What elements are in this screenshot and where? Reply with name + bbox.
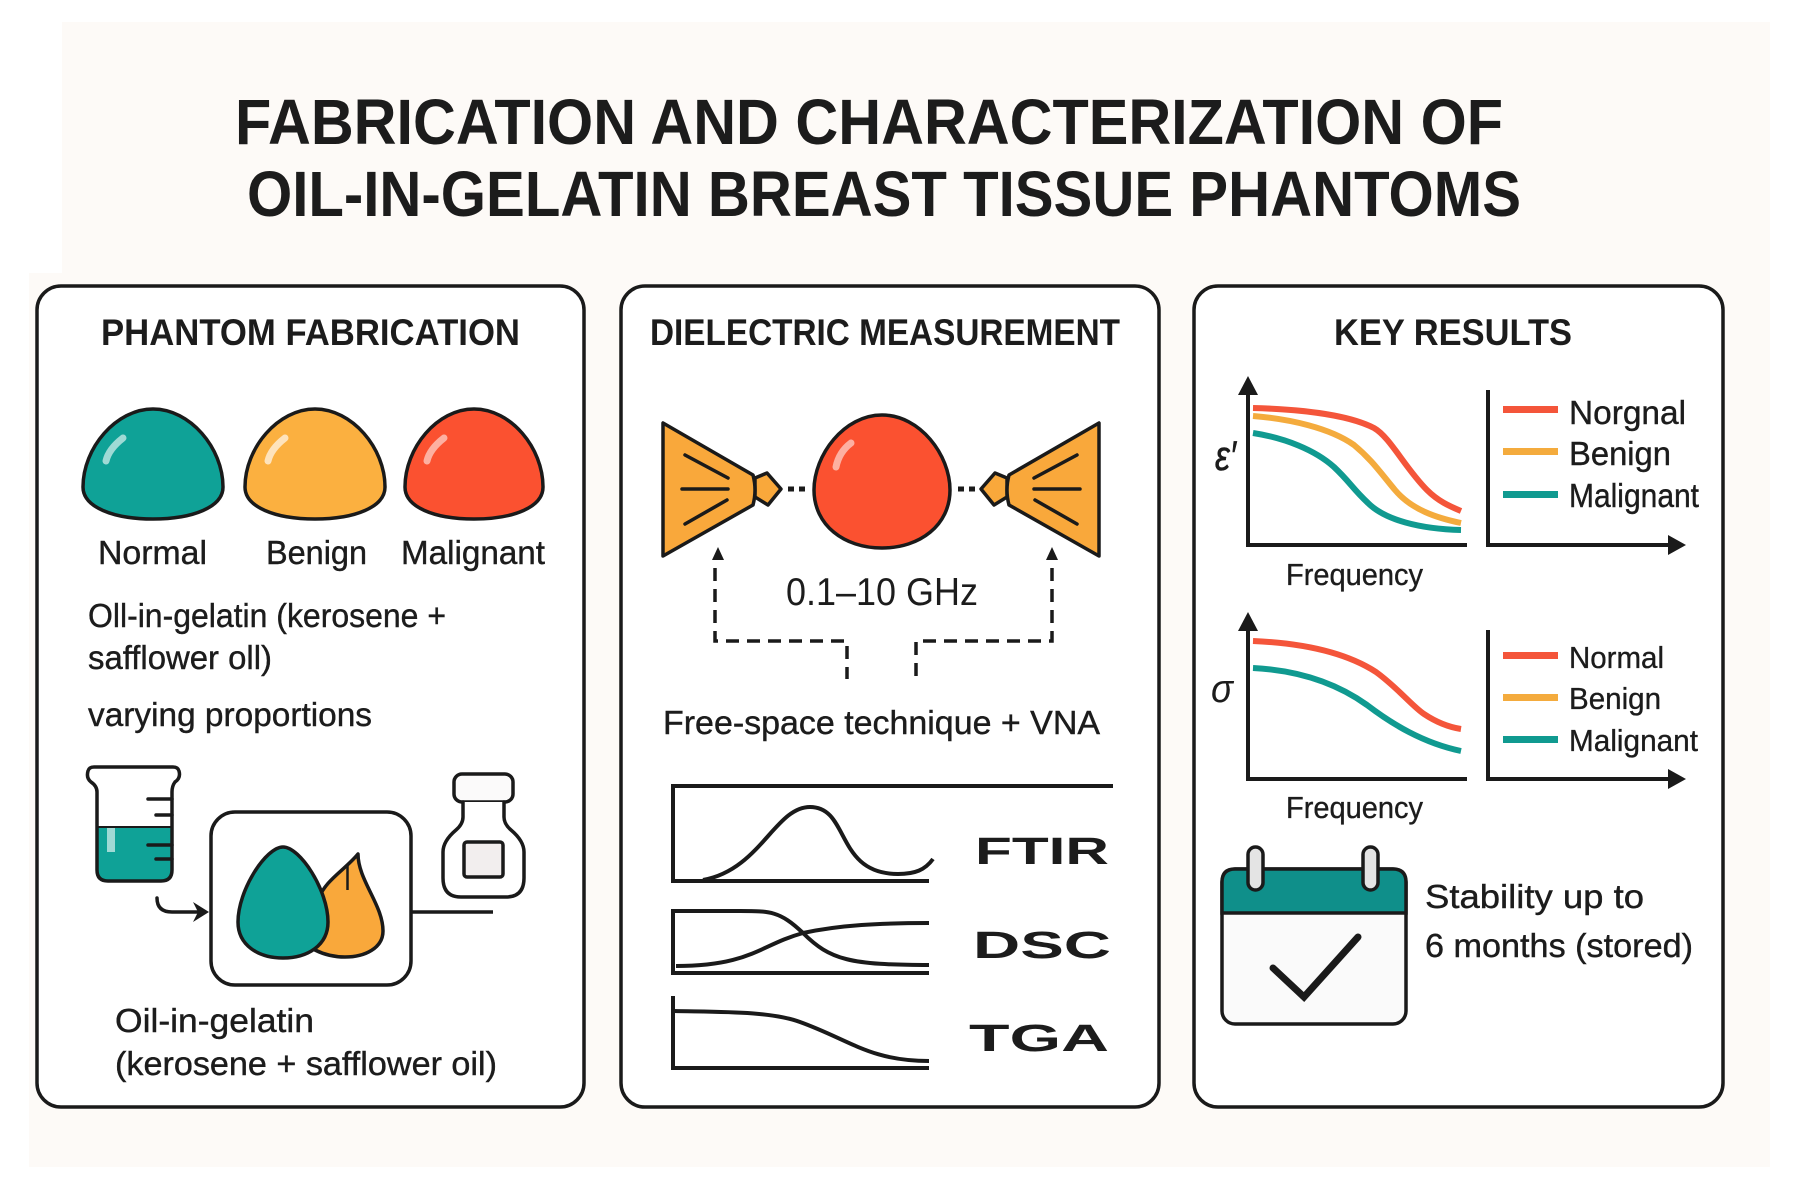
- icon: malignant phantom dome: [405, 409, 543, 519]
- icon: calendar with check mark: [1222, 847, 1406, 1024]
- legend: conductivity: Normal: [1569, 640, 1664, 675]
- icon: left horn antenna: [663, 423, 781, 556]
- label: DSC: DSC: [973, 925, 1111, 967]
- text: stability: 6 months (stored): [1425, 927, 1693, 964]
- text: composition: [88, 597, 446, 676]
- title: [235, 86, 1521, 230]
- icon: normal phantom dome: [83, 409, 223, 519]
- label: benign: Benign: [266, 534, 367, 571]
- chart: FTIR: [673, 786, 1113, 881]
- label: permittivity axis: ε′: [1215, 432, 1238, 479]
- heading: dielectric measurement: DIELECTRIC MEASUREMENT: [650, 312, 1120, 353]
- text: stability: Stability up to: [1425, 878, 1644, 915]
- arrow: beaker to mixture: [157, 898, 209, 922]
- legend: permittivity: Malignant: [1569, 477, 1699, 514]
- text: stability: [1425, 878, 1693, 964]
- icon: malignant phantom sphere: [814, 415, 950, 548]
- label: normal: Normal: [98, 534, 207, 571]
- connector line: [411, 910, 493, 914]
- icon: mixture box with oil and gelatin: [211, 812, 411, 985]
- label: TGA: TGA: [969, 1018, 1109, 1060]
- legend: conductivity: [1488, 630, 1698, 789]
- heading: key results: KEY RESULTS: [1334, 312, 1572, 353]
- signal dots: [958, 486, 975, 492]
- chart: permittivity vs frequency: [1215, 376, 1467, 592]
- label: frequency axis: Frequency: [1286, 790, 1423, 825]
- heading: phantom fabrication: PHANTOM FABRICATION: [101, 312, 520, 353]
- dashed connections to VNA: [712, 547, 1058, 679]
- signal dots: [788, 486, 805, 492]
- icon: oil bottle: [443, 774, 524, 897]
- panel: dielectric measurement: [621, 286, 1159, 1107]
- icon: benign phantom dome: [245, 409, 385, 519]
- label: frequency range: 0.1–10 GHz: [786, 571, 978, 614]
- text: technique: Free-space technique + VNA: [663, 704, 1100, 741]
- chart: DSC: [673, 911, 1111, 973]
- text: composition: Oll-in-gelatin (kerosene +: [88, 597, 446, 634]
- panel: key results: [1194, 286, 1723, 1107]
- title: FABRICATION AND CHARACTERIZATION OF: [235, 86, 1503, 158]
- text: composition: safflower oll): [88, 639, 272, 676]
- title: OIL-IN-GELATIN BREAST TISSUE PHANTOMS: [247, 158, 1521, 230]
- legend: conductivity: Malignant: [1569, 723, 1698, 758]
- text: oil-in-gelatin caption: Oil-in-gelatin: [115, 1002, 314, 1039]
- label: FTIR: FTIR: [975, 831, 1109, 873]
- chart: TGA: [673, 996, 1109, 1068]
- label: malignant: Malignant: [401, 534, 545, 571]
- legend: permittivity: Benign: [1569, 435, 1671, 472]
- text: oil-in-gelatin caption: [115, 1002, 497, 1082]
- icon: right horn antenna: [981, 423, 1099, 556]
- legend: permittivity: [1488, 390, 1699, 555]
- chart: conductivity vs frequency: [1211, 612, 1467, 825]
- legend: conductivity: Benign: [1569, 681, 1661, 716]
- label: conductivity axis: σ: [1211, 667, 1235, 711]
- icon: beaker: [87, 767, 180, 881]
- text: oil-in-gelatin caption: (kerosene + safflower oil): [115, 1045, 497, 1082]
- panel: phantom fabrication: [37, 286, 584, 1107]
- label: frequency axis: Frequency: [1286, 557, 1423, 592]
- text: varying proportions: varying proportions: [88, 696, 372, 733]
- legend: permittivity: Norgnal: [1569, 394, 1686, 431]
